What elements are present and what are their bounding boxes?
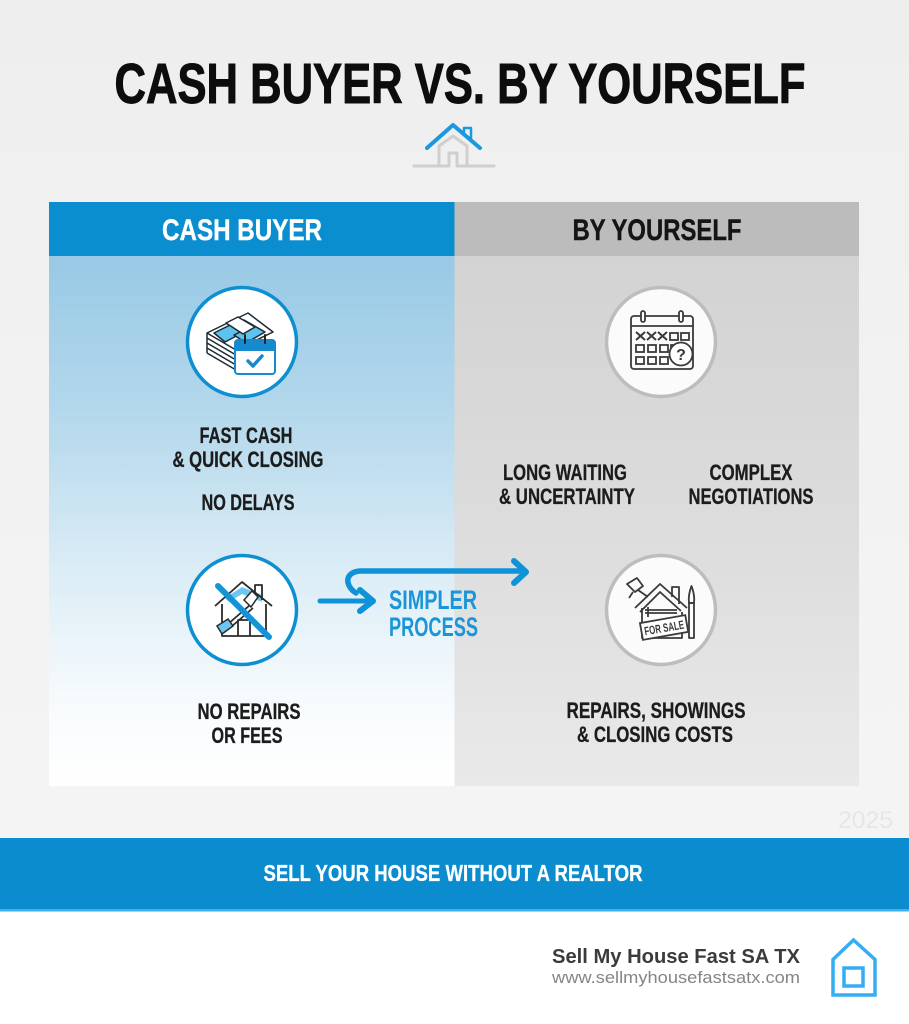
- icon: brand house: [833, 940, 875, 995]
- panel: cash buyer: [49, 202, 454, 786]
- text: simpler process: [389, 585, 478, 642]
- icon: cash and calendar: [188, 288, 296, 396]
- brand text: Sell My House Fast SA TX: [552, 946, 801, 968]
- text: long waiting: LONG WAITING: [503, 460, 627, 485]
- text: long waiting: [499, 460, 635, 509]
- text: no repairs: OR FEES: [212, 723, 282, 748]
- cash buyer header: CASH BUYER: [162, 214, 322, 247]
- text: long waiting: & UNCERTAINTY: [499, 484, 635, 509]
- icon: uncertain calendar: ?: [676, 347, 686, 364]
- icon: no repairs: [188, 556, 296, 664]
- icon: house logo: [414, 125, 494, 166]
- by yourself header: [454, 202, 859, 256]
- footer area: [0, 912, 909, 1024]
- text: repairs showings: & CLOSING COSTS: [577, 722, 733, 747]
- panel: by yourself: [454, 202, 859, 786]
- text: repairs showings: [566, 698, 746, 747]
- arrow: simpler process: [320, 561, 526, 611]
- brand text: [551, 946, 801, 987]
- text: fast cash: & QUICK CLOSING: [172, 447, 324, 472]
- text: no repairs: NO REPAIRS: [198, 699, 300, 724]
- icon: for sale house: FOR SALE: [643, 618, 685, 638]
- footer banner: SELL YOUR HOUSE WITHOUT A REALTOR: [264, 860, 643, 886]
- text: no delays: NO DELAYS: [202, 490, 294, 515]
- text: simpler process: PROCESS: [389, 612, 478, 642]
- year mark: 2025: [838, 807, 893, 834]
- footer banner: [0, 838, 909, 912]
- text: fast cash: [172, 423, 324, 472]
- text: complex negotiations: COMPLEX: [710, 460, 793, 485]
- icon: uncertain calendar: [606, 288, 716, 396]
- by yourself header: BY YOURSELF: [572, 214, 742, 247]
- text: repairs showings: REPAIRS, SHOWINGS: [566, 698, 746, 723]
- text: no repairs: [198, 699, 300, 748]
- icon: for sale house: [606, 556, 716, 664]
- text: fast cash: FAST CASH: [200, 423, 292, 448]
- text: simpler process: SIMPLER: [389, 585, 477, 615]
- text: complex negotiations: NEGOTIATIONS: [688, 484, 814, 509]
- brand text: www.sellmyhousefastsatx.com: [551, 968, 800, 987]
- cash buyer header: [49, 202, 454, 256]
- text: complex negotiations: [688, 460, 814, 509]
